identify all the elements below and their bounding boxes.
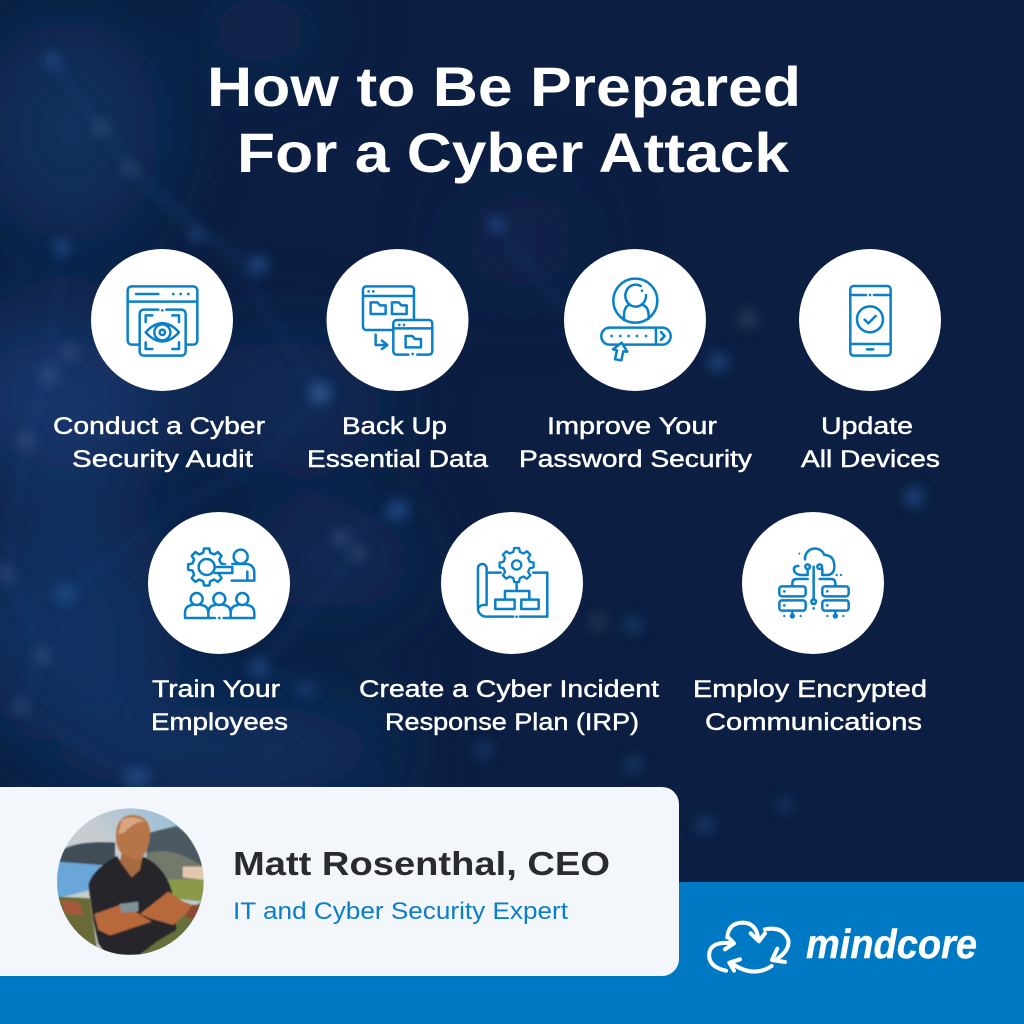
label <box>307 413 488 473</box>
author photo <box>57 808 204 955</box>
label <box>801 413 940 473</box>
blue footer band <box>0 882 1024 1024</box>
step: Create a Cyber Incident Response Plan <box>359 512 659 736</box>
label: Communications <box>705 709 922 736</box>
icon circle: phone check <box>799 249 941 391</box>
label: Password Security <box>519 446 753 473</box>
author role: IT and Cyber Security Expert <box>233 898 568 925</box>
author name: Matt Rosenthal, CEO <box>233 846 610 883</box>
icon circle: folder windows <box>326 249 468 391</box>
icon circle: audit eye <box>91 249 233 391</box>
label <box>151 676 288 736</box>
title: How to Be Prepared <box>207 55 801 118</box>
label: Essential Data <box>307 446 488 473</box>
panel: author card <box>0 787 679 976</box>
title: For a Cyber Attack <box>237 121 790 184</box>
label: Security Audit <box>72 446 253 473</box>
label: All Devices <box>801 446 940 473</box>
logo icon: cloud of arrows <box>709 923 789 972</box>
step: Conduct a Cyber Security Audit <box>53 249 265 473</box>
icon circle: user password <box>564 249 706 391</box>
icon circle: training group <box>148 512 290 654</box>
label: Train Your <box>152 676 280 703</box>
label: Response Plan (IRP) <box>385 709 639 736</box>
title <box>207 55 801 184</box>
step: Improve Your Password Security <box>519 249 753 473</box>
step: Employ Encrypted Communications <box>693 512 927 736</box>
label <box>359 676 659 736</box>
step: Train Your Employees <box>148 512 290 736</box>
icon circle: blueprint gear <box>441 512 583 654</box>
label <box>693 676 927 736</box>
label: Conduct a Cyber <box>53 413 265 440</box>
label <box>53 413 265 473</box>
step: Update All Devices <box>799 249 941 473</box>
label: Create a Cyber Incident <box>359 676 659 703</box>
step: Back Up Essential Data <box>307 249 488 473</box>
label: Improve Your <box>547 413 717 440</box>
label: Employ Encrypted <box>693 676 927 703</box>
logo: mindcore <box>709 921 977 972</box>
label: Employees <box>151 709 288 736</box>
icon circle: cloud servers <box>742 512 884 654</box>
logo wordmark: mindcore <box>806 921 977 967</box>
label: Update <box>821 413 913 440</box>
label <box>519 413 753 473</box>
label: Back Up <box>342 413 447 440</box>
